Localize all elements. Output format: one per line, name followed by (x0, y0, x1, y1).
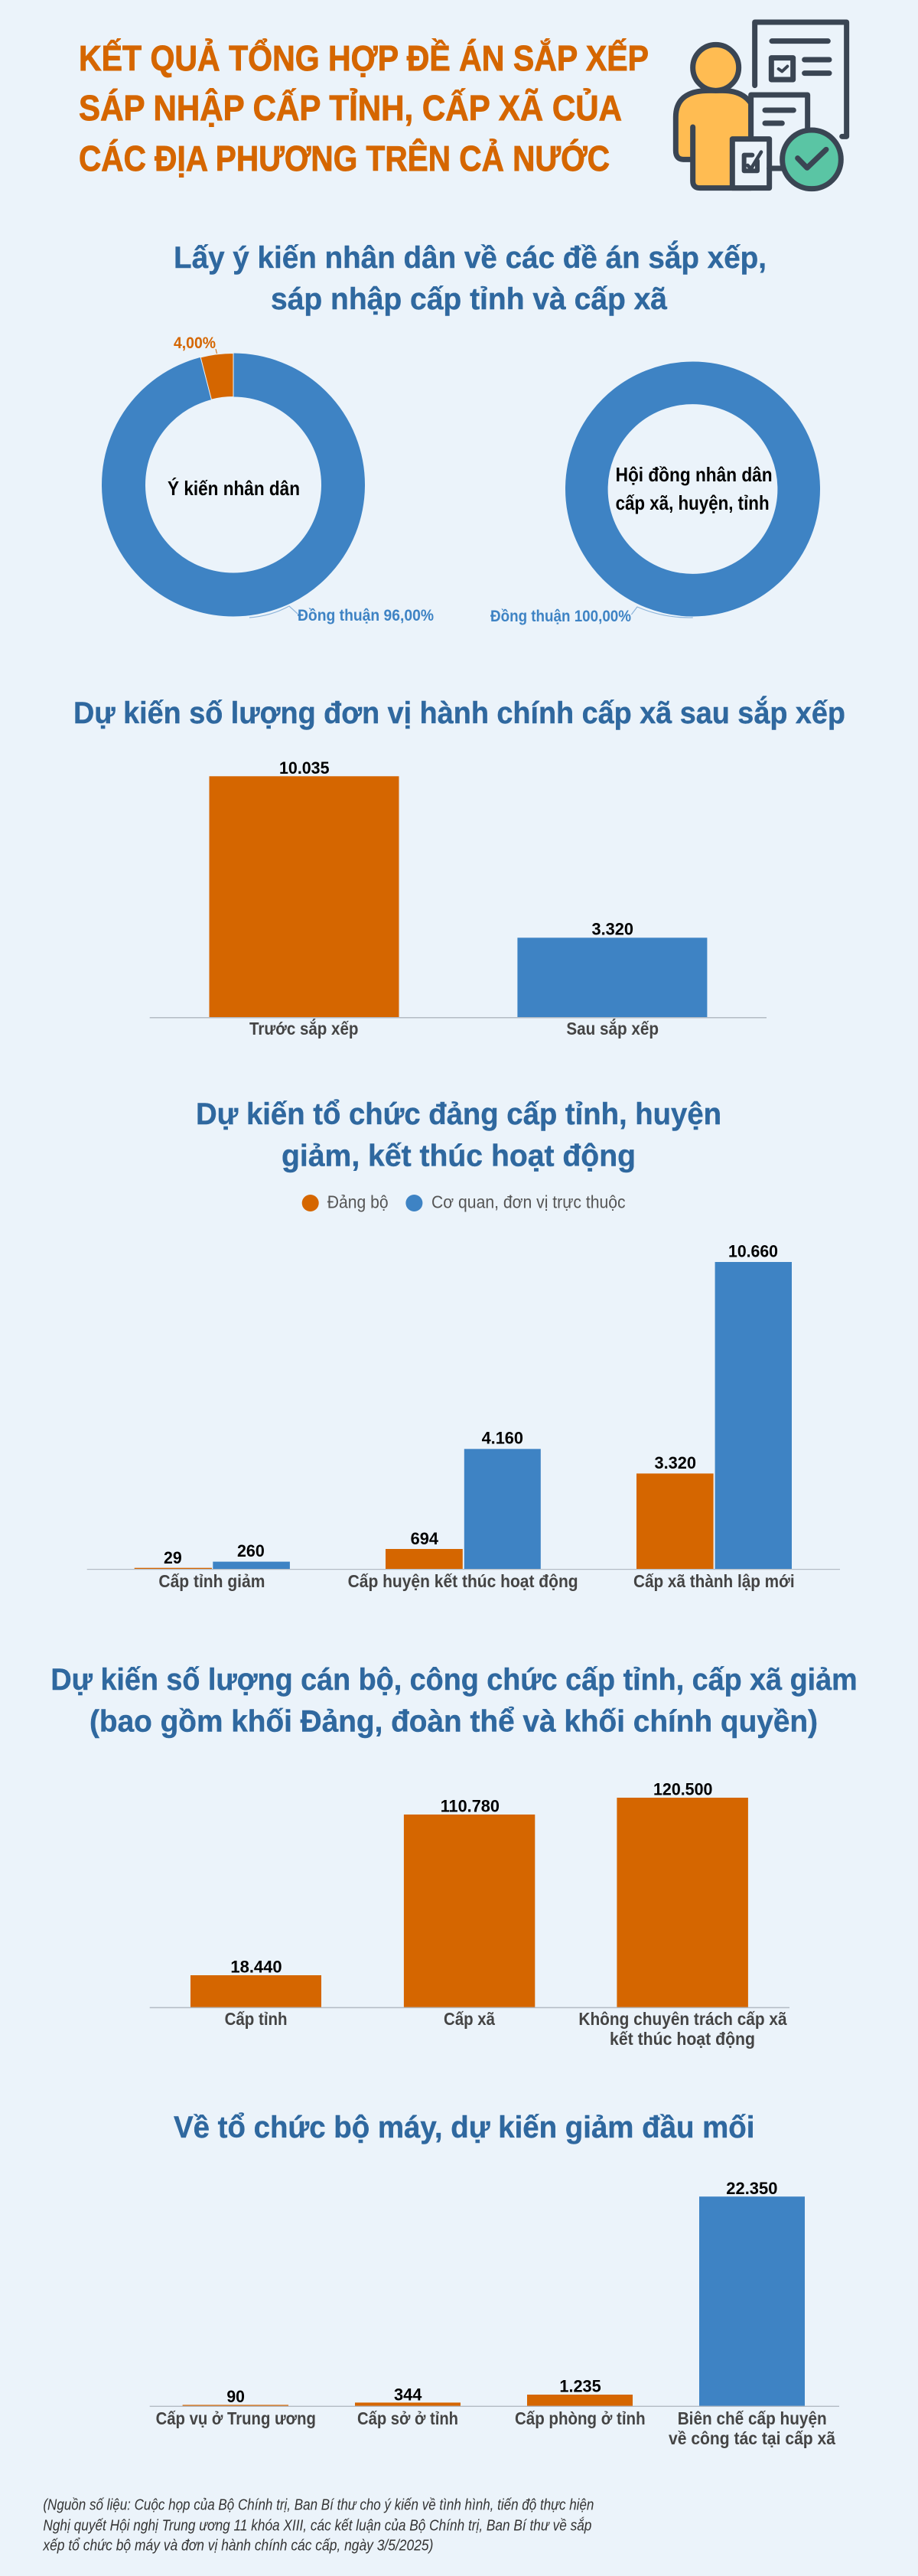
grouped bar chart: party organisations: Cấp xã thành lập mới (633, 1571, 795, 1591)
grouped bar chart: party organisations: 4.160 (482, 1429, 523, 1448)
source note: (Nguồn số liệu: Cuộc họp của Bộ Chính trị, Ban Bí thư cho ý kiến về tình hình, tiến độ thực hiện (43, 2497, 594, 2514)
legend (302, 1192, 626, 1212)
grouped bar chart: party organisations: Cấp tỉnh giảm (158, 1571, 265, 1591)
bar chart: apparatus reduction: 344 (394, 2385, 422, 2405)
heading: party organisations (196, 1097, 721, 1173)
bar chart: apparatus reduction: 1.235 (559, 2377, 601, 2396)
donut chart: people's councils: Đồng thuận 100,00% (490, 608, 631, 625)
bar chart: apparatus reduction: Biên chế cấp huyện (678, 2408, 827, 2428)
bar chart: apparatus reduction: Cấp phòng ở tỉnh (515, 2408, 646, 2428)
bar chart: officials reduction: 18.440 (230, 1958, 282, 1976)
bar chart: apparatus reduction: 90 (226, 2387, 245, 2406)
title: CÁC ĐỊA PHƯƠNG TRÊN CẢ NƯỚC (79, 139, 610, 178)
bar chart: officials reduction: kết thúc hoạt động (610, 2029, 755, 2049)
bar chart: apparatus reduction: 22.350 (726, 2179, 777, 2198)
donut chart: public opinion: 4,00% (174, 334, 216, 352)
bar chart: apparatus reduction: về công tác tại cấp xã (669, 2428, 835, 2448)
source note (43, 2497, 594, 2555)
bar chart: commune-level units: Sau sắp xếp (566, 1018, 659, 1039)
source note: xếp tổ chức bộ máy và đơn vị hành chính các cấp, ngày 3/5/2025) (43, 2538, 433, 2555)
heading: officials reduction (50, 1663, 858, 1739)
bar chart: officials reduction (150, 1779, 789, 2049)
panel: officials reduction (50, 1663, 858, 2049)
title: SÁP NHẬP CẤP TỈNH, CẤP XÃ CỦA (79, 88, 622, 128)
heading: commune-level units: Dự kiến số lượng đơn vị hành chính cấp xã sau sắp xếp (73, 695, 845, 730)
legend: Đảng bộ (327, 1192, 389, 1212)
panel: public opinion donuts (124, 240, 799, 625)
heading: officials reduction: (bao gồm khối Đảng, đoàn thể và khối chính quyền) (90, 1705, 818, 1739)
title (79, 38, 649, 178)
heading: apparatus reduction: Về tổ chức bộ máy, dự kiến giảm đầu mối (174, 2111, 754, 2144)
heading: officials reduction: Dự kiến số lượng cán bộ, công chức cấp tỉnh, cấp xã giảm (50, 1663, 858, 1697)
panel: party organisations (87, 1097, 840, 1591)
donut chart: people's councils: cấp xã, huyện, tỉnh (616, 491, 770, 514)
donut chart: people's councils (490, 383, 799, 625)
bar chart: commune-level units: 3.320 (592, 920, 633, 939)
heading: party organisations: giảm, kết thúc hoạt động (282, 1140, 636, 1173)
source note: Nghị quyết Hội nghị Trung ương 11 khóa XIII, các kết luận của Bộ Chính trị, Ban Bí thư về sắp (43, 2516, 591, 2535)
bar chart: apparatus reduction (150, 2179, 839, 2448)
bar chart: apparatus reduction: Cấp sở ở tỉnh (357, 2408, 458, 2428)
grouped bar chart: party organisations: 694 (411, 1529, 439, 1548)
heading: party organisations: Dự kiến tổ chức đảng cấp tỉnh, huyện (196, 1097, 721, 1131)
legend: Cơ quan, đơn vị trực thuộc (431, 1192, 626, 1212)
donut chart: public opinion: Đồng thuận 96,00% (298, 607, 434, 624)
donut chart: public opinion: Ý kiến nhân dân (168, 477, 300, 500)
bar chart: commune-level units: Trước sắp xếp (249, 1018, 358, 1039)
donut chart: public opinion (124, 334, 434, 624)
title: KẾT QUẢ TỔNG HỢP ĐỀ ÁN SẮP XẾP (79, 38, 649, 78)
heading: public opinion: sáp nhập cấp tỉnh và cấp xã (271, 282, 668, 316)
grouped bar chart: party organisations: 29 (164, 1548, 182, 1567)
grouped bar chart: party organisations: 260 (237, 1541, 265, 1560)
panel: apparatus reduction (150, 2111, 839, 2448)
bar chart: commune-level units: 10.035 (279, 758, 329, 778)
grouped bar chart: party organisations (87, 1241, 840, 1591)
bar chart: officials reduction: Cấp tỉnh (225, 2009, 288, 2029)
bar chart: officials reduction: Không chuyên trách cấp xã (578, 2009, 787, 2029)
bar chart: officials reduction: 120.500 (653, 1779, 712, 1798)
donut chart: people's councils: Hội đồng nhân dân (616, 463, 773, 486)
icon: person with documents and check mark (675, 22, 847, 189)
heading: public opinion (174, 240, 767, 316)
grouped bar chart: party organisations: Cấp huyện kết thúc hoạt động (348, 1571, 578, 1591)
panel: commune-level units (73, 695, 845, 1039)
bar chart: commune-level units (150, 758, 767, 1039)
grouped bar chart: party organisations: 10.660 (728, 1241, 778, 1260)
grouped bar chart: party organisations: 3.320 (655, 1453, 696, 1472)
heading: public opinion: Lấy ý kiến nhân dân về các đề án sắp xếp, (174, 240, 767, 275)
bar chart: officials reduction: 110.780 (441, 1797, 500, 1815)
bar chart: officials reduction: Cấp xã (444, 2009, 495, 2029)
bar chart: apparatus reduction: Cấp vụ ở Trung ương (156, 2408, 316, 2428)
